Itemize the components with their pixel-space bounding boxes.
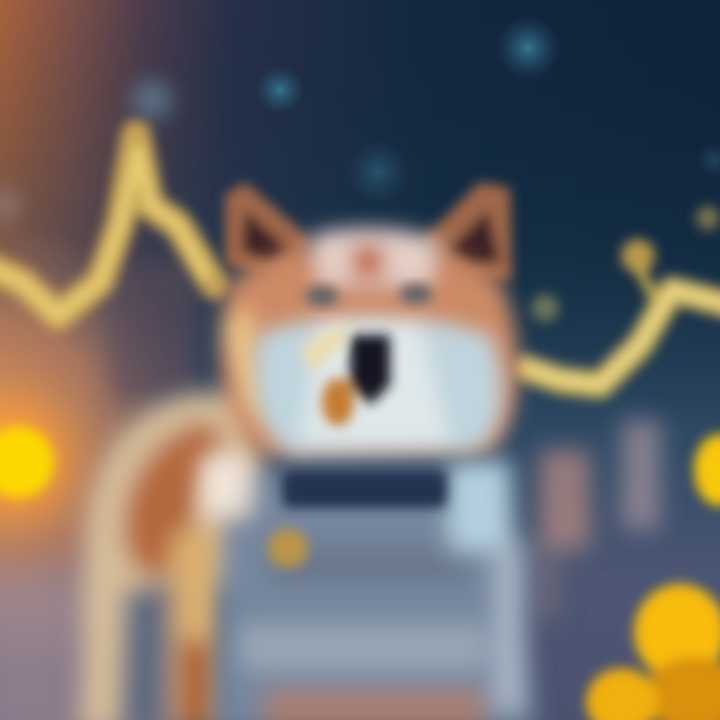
glowing coin: left [0,404,75,520]
dog: eyes [305,284,433,306]
dog: collar [282,470,447,508]
blurred city skyline [110,260,660,620]
dog: collar charm [268,528,308,568]
dog [78,182,535,720]
dog: head [220,228,518,455]
market chart line: left section [0,135,215,316]
market chart line: right section [525,206,720,385]
background glowing dots [0,16,720,221]
dog: chest [200,455,535,720]
dog: face [254,316,503,455]
dog: nose and mouth [300,322,390,426]
dog: ears [225,182,512,285]
coin pile: bottom right [586,584,720,720]
glowing coin: right [694,434,720,506]
dog: tail and back [78,392,260,720]
